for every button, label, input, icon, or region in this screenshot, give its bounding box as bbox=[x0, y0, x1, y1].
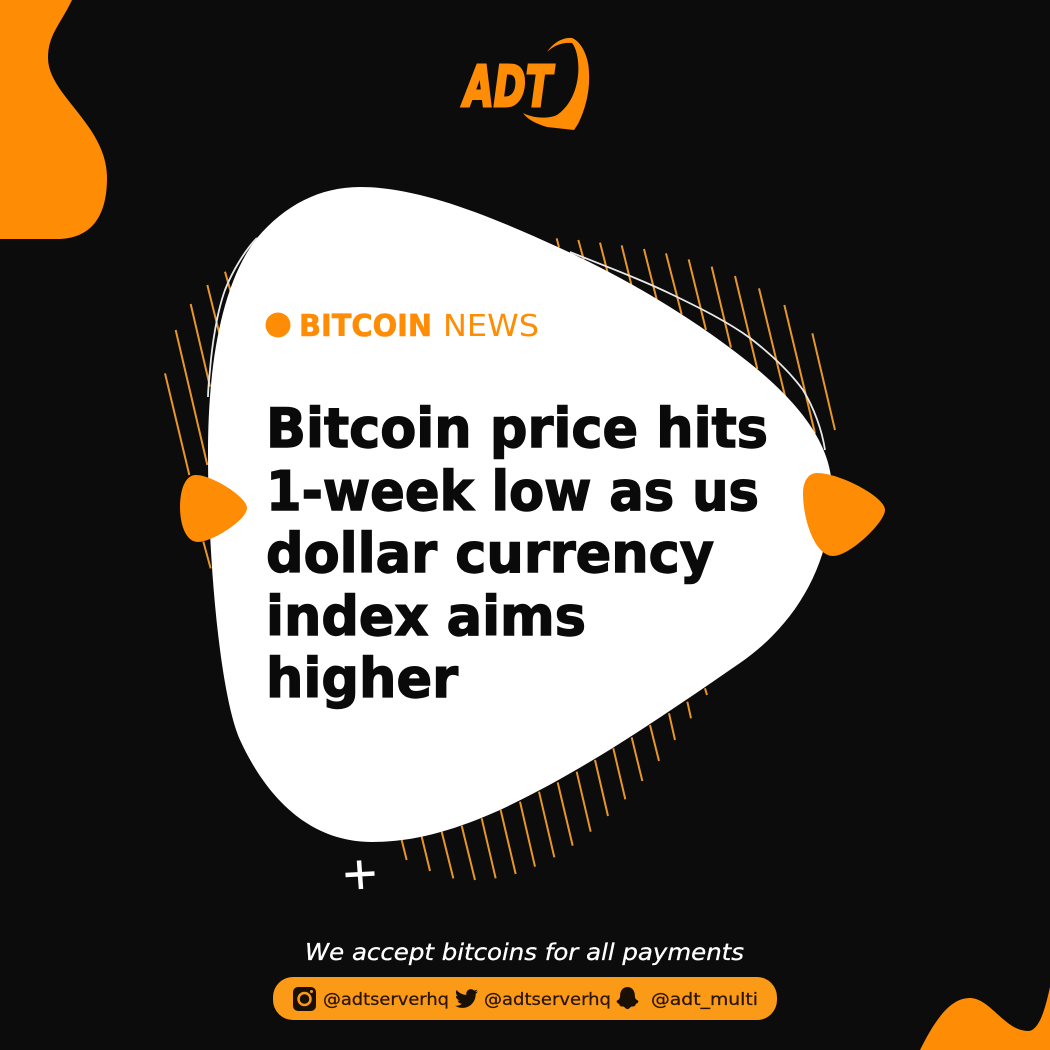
plus icon bbox=[346, 860, 374, 889]
white card blob bbox=[208, 187, 832, 842]
hatch lines: bottom bbox=[402, 688, 707, 880]
right orange play shape bbox=[803, 473, 885, 556]
left orange play shape bbox=[180, 475, 247, 542]
logo: ADT bbox=[461, 38, 589, 130]
handle: twitter: @adtserverhq bbox=[484, 990, 611, 1010]
label: NEWS: NEWS bbox=[443, 309, 539, 344]
headline: dollar currency bbox=[266, 522, 714, 585]
thin white outline curve bbox=[208, 238, 825, 450]
category label bbox=[266, 309, 539, 344]
logo swoosh bbox=[523, 38, 589, 130]
icon: twitter bbox=[455, 989, 478, 1008]
headline bbox=[266, 397, 768, 710]
tagline: We accept bitcoins for all payments bbox=[305, 940, 744, 966]
icon: snapchat bbox=[617, 987, 638, 1009]
headline: higher bbox=[266, 647, 458, 710]
social handles pill bbox=[273, 977, 777, 1020]
hatch lines: left bbox=[165, 272, 231, 568]
headline: 1-week low as us bbox=[266, 460, 759, 523]
corner blob: bottom right bbox=[920, 987, 1050, 1050]
headline: index aims bbox=[266, 585, 586, 648]
handle: snapchat: @adt_multi bbox=[651, 990, 758, 1010]
corner blob: top left bbox=[0, 0, 107, 239]
bullet dot bbox=[266, 312, 290, 338]
hatch lines: upper right bbox=[557, 238, 835, 433]
handle: instagram: @adtserverhq bbox=[323, 990, 449, 1010]
logo lettering: ADT bbox=[461, 55, 555, 120]
icon: instagram bbox=[293, 987, 316, 1011]
label: BITCOIN: BITCOIN bbox=[299, 309, 432, 344]
pill background bbox=[273, 977, 777, 1020]
headline: Bitcoin price hits bbox=[266, 397, 768, 460]
